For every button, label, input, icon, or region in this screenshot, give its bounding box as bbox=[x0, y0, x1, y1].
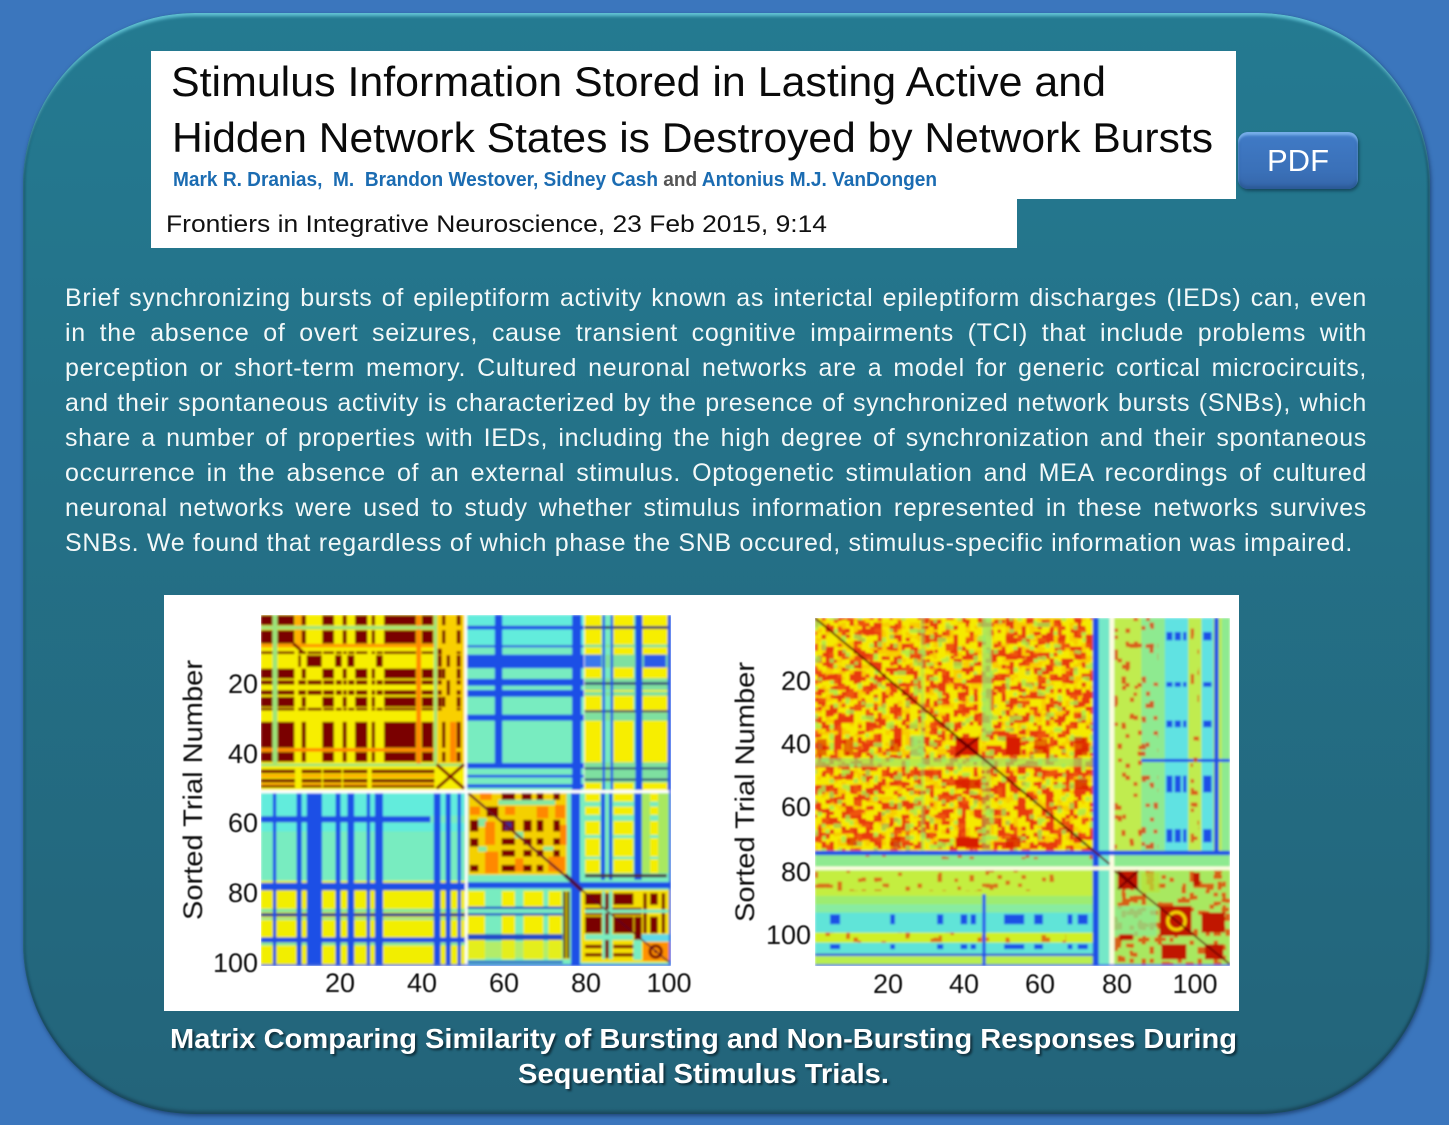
title bbox=[171, 58, 1213, 161]
left matrix bbox=[261, 615, 671, 966]
abstract paragraph: perception or short-term memory. Cultured neuronal networks are a model for generic cortical microcircuits, bbox=[65, 354, 1367, 382]
abstract paragraph: neuronal networks were used to study whether stimulus information represented in these networks survives bbox=[65, 494, 1367, 522]
left matrix axis labels: 100 bbox=[213, 948, 258, 978]
left matrix axis labels: 40 bbox=[407, 968, 437, 998]
right top bbox=[1115, 618, 1230, 851]
abstract paragraph: Brief synchronizing bursts of epileptiform activity known as interictal epileptiform discharges (IEDs) can, even bbox=[65, 284, 1367, 312]
right matrix axis labels: Sorted Trial Number bbox=[730, 662, 760, 922]
right matrix axis labels: 20 bbox=[873, 969, 903, 999]
right matrix axis labels: 20 bbox=[781, 666, 811, 696]
BR bottom left bbox=[468, 891, 562, 959]
BR quadrant bbox=[468, 793, 671, 966]
title and figure artwork bbox=[151, 51, 1239, 1092]
BR bottom right bbox=[581, 890, 669, 963]
title: Stimulus Information Stored in Lasting Active and bbox=[171, 58, 1106, 105]
left matrix axis labels: 60 bbox=[228, 808, 258, 838]
left matrix axis labels: Sorted Trial Number bbox=[178, 660, 208, 920]
right matrix axis labels: 60 bbox=[781, 792, 811, 822]
left matrix axis labels: 40 bbox=[228, 739, 258, 769]
BR blue bars bbox=[468, 793, 669, 966]
BR right side bbox=[585, 793, 658, 873]
figure caption: Matrix Comparing Similarity of Bursting and Non-Bursting Responses During bbox=[170, 1023, 1237, 1054]
right matrix axis labels: 60 bbox=[1025, 969, 1055, 999]
figure caption bbox=[170, 1023, 1237, 1089]
authors: Mark R. Dranias, M. Brandon Westover, Sidney Cash and Antonius M.J. VanDongen bbox=[173, 169, 937, 191]
abstract paragraph bbox=[65, 284, 1367, 557]
separators bbox=[1093, 618, 1099, 966]
PDF button: PDF bbox=[1267, 143, 1329, 178]
TL quadrant bbox=[261, 612, 464, 792]
left matrix axis labels bbox=[178, 660, 692, 998]
title box bbox=[151, 51, 1236, 248]
left matrix axis labels: 100 bbox=[646, 968, 692, 998]
figure caption: Sequential Stimulus Trials. bbox=[518, 1058, 889, 1089]
right matrix axis labels: 80 bbox=[781, 857, 811, 887]
journal citation: Frontiers in Integrative Neuroscience, 23 Feb 2015, 9:14 bbox=[166, 211, 827, 238]
abstract paragraph: and their spontaneous activity is characterized by the presence of synchronized network bursts (SNBs), which bbox=[65, 389, 1367, 417]
left matrix axis labels: 60 bbox=[489, 968, 519, 998]
title: Hidden Network States is Destroyed by Network Bursts bbox=[172, 114, 1213, 161]
right matrix axis labels: 40 bbox=[781, 729, 811, 759]
BL quadrant bbox=[261, 793, 466, 881]
left matrix axis labels: 80 bbox=[571, 968, 601, 998]
right matrix bbox=[815, 618, 1230, 966]
right matrix axis labels bbox=[730, 662, 1218, 999]
figure: similarity matrices bbox=[164, 595, 1239, 1011]
right matrix axis labels: 40 bbox=[949, 969, 979, 999]
abstract paragraph: occurrence in the absence of an external stimulus. Optogenetic stimulation and MEA recordings of cultured bbox=[65, 459, 1367, 487]
right matrix axis labels: 80 bbox=[1102, 969, 1132, 999]
PDF button bbox=[1238, 132, 1358, 189]
left matrix axis labels: 80 bbox=[228, 878, 258, 908]
left matrix axis labels: 20 bbox=[228, 669, 258, 699]
right matrix axis labels: 100 bbox=[766, 920, 811, 950]
abstract paragraph: SNBs. We found that regardless of which phase the SNB occured, stimulus-specific information was impaired. bbox=[65, 529, 1353, 557]
rows band bbox=[815, 855, 1230, 866]
abstract paragraph: in the absence of overt seizures, cause transient cognitive impairments (TCI) that include problems with bbox=[65, 319, 1367, 347]
left matrix axis labels: 20 bbox=[325, 968, 355, 998]
TR quadrant bbox=[467, 615, 584, 790]
abstract paragraph: share a number of properties with IEDs, including the high degree of synchronization and their spontaneous bbox=[65, 424, 1367, 452]
right matrix axis labels: 100 bbox=[1172, 969, 1218, 999]
bottom left bbox=[815, 871, 1093, 904]
bottom right bbox=[1115, 871, 1230, 964]
